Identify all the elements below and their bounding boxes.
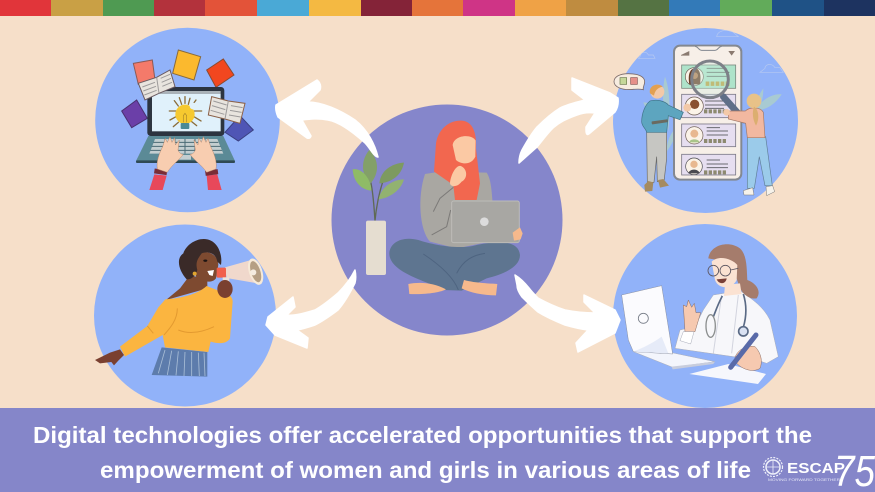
icon: waving hand: [683, 300, 701, 332]
icon: left arm and hand: [149, 137, 183, 190]
logo wordmark: ESCAP: [787, 461, 845, 477]
icon: hand on laptop: [513, 227, 523, 241]
icon: doctor's coat: [675, 291, 778, 363]
arrow: to advocacy circle: [266, 270, 356, 348]
icon: face: [195, 252, 218, 282]
arrow: to learning circle: [276, 80, 378, 157]
icon: legs: [389, 239, 520, 291]
icon: woman's torso: [420, 172, 493, 248]
icon: hijab: [434, 121, 480, 200]
icon: mouth: [717, 278, 727, 283]
icon: glasses: [708, 265, 738, 276]
icon: neck: [724, 283, 742, 296]
icon: feet: [408, 280, 497, 295]
icon: hand on chin: [450, 166, 466, 186]
icon: yellow book: [173, 50, 201, 80]
icon: review card 2: [682, 94, 736, 118]
icon: clouds: [638, 30, 783, 72]
icon: neck and shoulder: [166, 275, 207, 300]
icon: review card 4: [682, 154, 736, 175]
icon: review card 1: [682, 65, 736, 88]
icon: hair back: [708, 244, 759, 299]
icon: light bulb: [169, 97, 202, 129]
icon: megaphone: [217, 257, 266, 287]
icon: earring: [193, 272, 197, 276]
icon: leaves: [643, 77, 782, 152]
panel: central circle, woman with laptop: [332, 104, 562, 336]
icon: phone: [674, 46, 741, 180]
icon: hair: [179, 239, 221, 279]
panel: learning circle, laptop and books: [95, 28, 280, 212]
icon: mouth and eye: [203, 259, 214, 276]
icon: paper: [689, 364, 766, 384]
icon: coral book: [133, 60, 155, 84]
arrow: to reviews circle: [519, 78, 618, 163]
icon: indigo book: [225, 116, 253, 141]
icon: laptop: [452, 201, 519, 243]
icon: right arm and hand: [190, 137, 222, 190]
icon: magnifying glass: [692, 61, 744, 120]
icon: hand on megaphone: [217, 280, 233, 298]
caption line 1: Digital technologies offer accelerated opportunities that support the: [33, 422, 812, 448]
icon: skirt: [152, 347, 207, 377]
icon: open book right: [208, 97, 245, 123]
icon: stethoscope: [706, 294, 748, 337]
arrow: to telemedicine circle: [515, 275, 620, 352]
panel: telemedicine circle, doctor at laptop: [613, 224, 797, 408]
icon: red book: [207, 59, 234, 87]
icon: UN emblem: [764, 458, 782, 476]
icon: review card 3: [682, 124, 736, 147]
panel: advocacy circle, woman with megaphone: [94, 224, 276, 406]
icon: face: [453, 136, 476, 163]
icon: open book left: [138, 70, 175, 100]
panel: reviews circle, phone and two people: [613, 28, 798, 213]
icon: face: [712, 258, 737, 287]
icon: speech bubble: [614, 74, 645, 90]
icon: cuff: [680, 332, 694, 344]
icon: yellow sweater: [120, 286, 233, 357]
icon: man: [642, 85, 691, 192]
caption band: [0, 408, 875, 492]
logo: ESCAP 75: [764, 447, 875, 492]
icon: purple book: [122, 100, 147, 128]
icon: woman: [723, 94, 775, 196]
icon: arm crease lines: [432, 187, 453, 235]
icon: laptop: [136, 87, 235, 163]
icon: plant: [353, 150, 404, 275]
icon: pointing hand: [95, 349, 124, 365]
SDG colour stripe: [0, 0, 875, 16]
icon: pen: [731, 335, 756, 367]
logo tagline: MOVING FORWARD TOGETHER: [768, 477, 840, 482]
caption line 2: empowerment of women and girls in various areas of life: [100, 457, 751, 483]
icon: laptop: [622, 286, 715, 369]
icon: writing hand: [735, 346, 761, 370]
